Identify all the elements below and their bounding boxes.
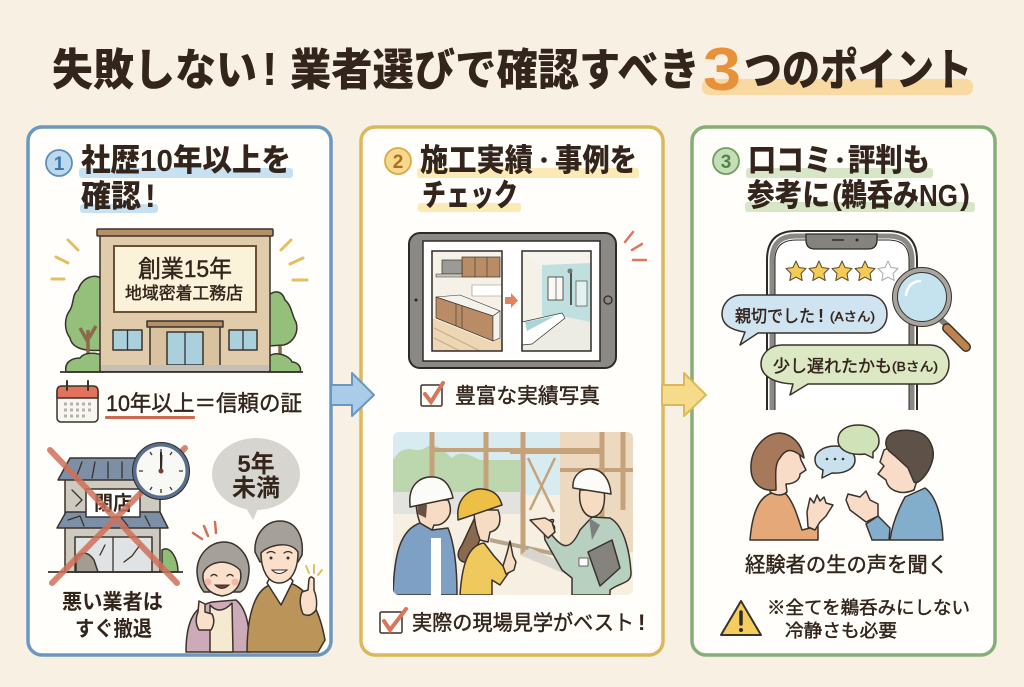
arrow: before to after	[505, 293, 518, 308]
illustration: elderly couple	[186, 521, 325, 652]
text: trust: 10年以上＝信頼の証	[106, 391, 302, 416]
panel: point 2 track record	[361, 127, 663, 655]
text: bad contractors: 悪い業者は	[62, 591, 163, 614]
illustration: closed shop: 閉店	[94, 492, 132, 515]
illustration: closed shop	[48, 448, 185, 583]
note text: 冷静さも必要	[785, 621, 897, 641]
number badge 1: 1	[54, 154, 65, 175]
speech bubble: under 5 years: 未満	[232, 475, 280, 502]
person: site supervisor	[530, 469, 631, 595]
arrow: panel 2 to panel 3	[662, 373, 706, 416]
title: つのポイント	[744, 45, 972, 95]
icon: magnifying glass	[892, 268, 966, 347]
accent rays	[625, 232, 646, 260]
number badge 3: 3	[721, 152, 731, 173]
icon: warning triangle	[721, 601, 761, 635]
icon: calendar	[57, 381, 98, 422]
person: woman in yellow helmet	[458, 489, 516, 595]
title: 失敗しない	[52, 46, 257, 95]
heading 3: (	[832, 179, 842, 212]
man	[846, 430, 943, 540]
heading 1	[79, 143, 293, 214]
note text: ※全てを鵜呑みにしない	[767, 598, 970, 618]
heading 3: 鵜呑みNG	[841, 178, 958, 213]
title: !	[262, 43, 277, 95]
heading 1: 社歴10年以上を	[81, 143, 291, 178]
heading 3: 評判も	[848, 143, 930, 178]
review bubble B: (Bさん)	[892, 360, 938, 374]
illustration: established building: 地域密着工務店	[125, 284, 243, 303]
illustration: tablet with photos	[409, 232, 646, 368]
check label: site visit: !	[638, 610, 645, 635]
illustration: phone with reviews	[722, 231, 966, 410]
speech bubble: under 5 years: 5年	[237, 451, 275, 478]
number badge 1	[46, 150, 72, 176]
illustration: site visit	[393, 432, 633, 595]
illustration: established building: 創業15年	[138, 256, 232, 283]
check label: photos: 豊富な実績写真	[455, 385, 600, 408]
review bubble B: 少し遅れたかも	[773, 357, 892, 376]
title: 3	[703, 36, 741, 103]
review bubble A: 親切でした	[735, 307, 815, 326]
heading 3: 参考に	[747, 178, 830, 213]
heading 2	[417, 143, 639, 213]
heading 3: 口コミ	[748, 143, 832, 178]
heading 2: チェック	[422, 178, 518, 213]
illustration: established building	[52, 229, 307, 372]
photo: kitchen	[432, 251, 502, 351]
title: 業者選びで確認すべき	[290, 46, 700, 95]
arrow: panel 1 to panel 2	[331, 373, 374, 416]
rating stars	[786, 261, 898, 280]
speech bubbles	[815, 425, 879, 478]
review bubble A: !	[818, 306, 824, 326]
heading 2: 施工実績	[420, 143, 533, 178]
illustration: two people talking	[750, 425, 943, 540]
heading 1: !	[145, 178, 156, 214]
review bubble B	[761, 345, 949, 395]
number badge 2: 2	[393, 152, 403, 173]
panel: point 1 company history	[28, 127, 331, 655]
note text	[767, 598, 970, 641]
text: listen to real voices: 経験者の生の声を聞く	[745, 554, 948, 577]
text: bad contractors	[62, 591, 163, 641]
panel: point 3 reviews	[692, 127, 995, 655]
heading 2: 事例を	[555, 143, 637, 178]
title	[52, 36, 973, 103]
speech bubble: under 5 years	[212, 438, 300, 520]
person: man in white helmet	[393, 477, 457, 595]
photo: bathroom	[522, 251, 591, 351]
number badge 3	[713, 148, 739, 174]
check label: site visit: 実際の現場見学がベスト	[412, 612, 634, 635]
review bubble A	[722, 295, 887, 345]
heading 3: )	[960, 179, 970, 212]
icon: clock	[132, 442, 190, 500]
heading 1: 確認	[81, 179, 141, 214]
review bubble A: (Aさん)	[830, 310, 875, 324]
text: bad contractors: すぐ撤退	[75, 618, 152, 641]
heading 3	[745, 143, 975, 213]
woman	[750, 433, 833, 540]
number badge 2	[385, 148, 411, 174]
title highlight	[702, 79, 973, 95]
